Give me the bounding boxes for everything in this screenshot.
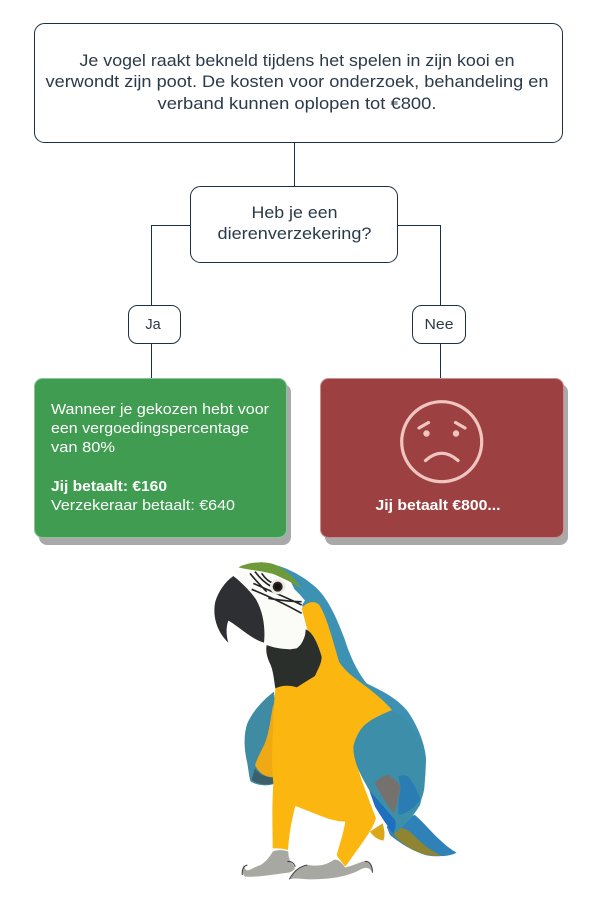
scenario text box: verband kunnen oplopen tot €800.	[158, 95, 436, 113]
question box: Heb je een	[252, 204, 338, 222]
parrot feet	[242, 850, 373, 879]
answer box: Ja: Ja	[145, 317, 162, 333]
scenario text box: verwondt zijn poot. De kosten voor onderzoek, behandeling en	[46, 73, 548, 91]
parrot body and legs	[272, 602, 392, 867]
panel: insured outcome: Wanneer je gekozen hebt voor	[51, 401, 269, 418]
question box: dierenverzekering?	[218, 225, 372, 243]
answer box: Nee: Nee	[424, 317, 454, 333]
question box	[190, 186, 398, 262]
answer box: Nee	[412, 306, 466, 344]
parrot back and neck	[260, 562, 426, 834]
parrot throat	[266, 629, 322, 688]
panel: insured outcome: een vergoedingspercentage	[51, 420, 249, 437]
parrot right wing	[353, 711, 426, 834]
parrot beak	[214, 576, 264, 643]
panel: insured outcome: van 80%	[51, 439, 115, 456]
connector lines	[152, 142, 440, 379]
icon: sad face	[402, 402, 482, 482]
panel: insured outcome	[34, 378, 291, 545]
parrot face	[234, 570, 305, 649]
outcome label: Jij betaalt €800...	[376, 498, 500, 514]
panel: insured outcome: Verzekeraar betaalt: €640	[51, 497, 235, 514]
answer box: Ja	[128, 306, 180, 344]
parrot crown	[238, 562, 302, 588]
panel: uninsured outcome	[320, 378, 568, 545]
parrot eye	[270, 579, 285, 594]
parrot left wing	[245, 692, 277, 785]
scenario text box: Je vogel raakt bekneld tijdens het spelen in zijn kooi en	[80, 52, 514, 70]
scenario text box	[34, 24, 562, 142]
illustration: macaw parrot	[214, 562, 457, 879]
parrot tail	[370, 815, 457, 856]
panel: insured outcome: Jij betaalt: €160	[51, 478, 167, 495]
